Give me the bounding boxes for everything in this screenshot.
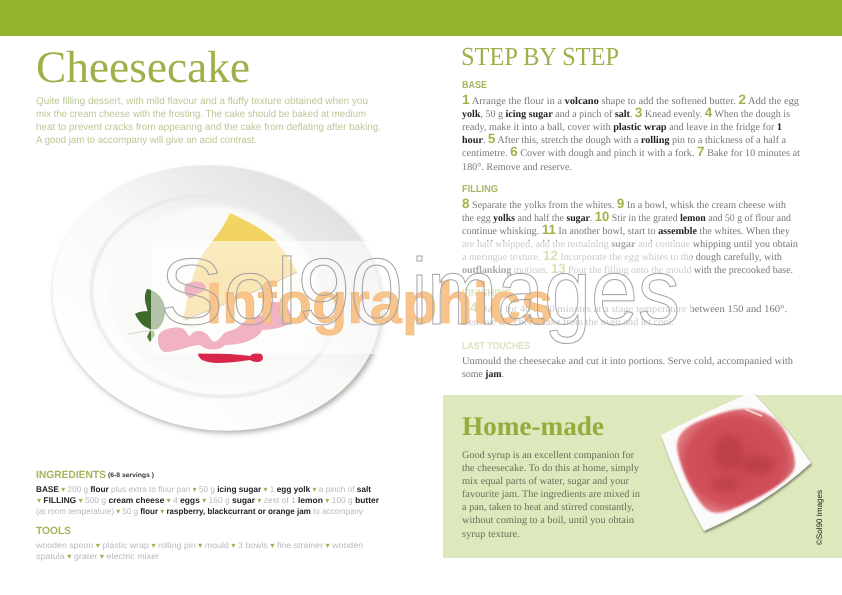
ingredients: (6-8 servings ) <box>108 472 154 479</box>
tools: TOOLS <box>36 525 71 537</box>
copyright: ©Sol90 Images <box>815 490 824 545</box>
section: filling: 8 Separate the yolks from the whites. 9 In a bowl, whisk the cream cheese with <box>462 196 786 211</box>
ingredients: ▾ FILLING ▾ 500 g cream cheese ▾ 4 eggs ▾ 160 g sugar ▾ zest of 1 lemon ▾ 100 g butter <box>37 495 380 505</box>
section: filling: continue whisking. 11 In another bowl, start to assemble the whites. When they <box>462 222 791 237</box>
intro text: A good jam to accompany will give an acid contrast. <box>36 135 257 146</box>
home-made text <box>462 450 640 540</box>
section: finishing <box>462 288 787 328</box>
section: base: hour. 5 After this, stretch the dough with a rolling pin to a thickness of a half a <box>462 131 786 146</box>
section: filling: a meringue texture. 12 Incorporate the egg whites to the dough carefully, with <box>462 248 782 263</box>
cheesecake slice <box>183 213 299 328</box>
intro text: Quite filling dessert, with mild flavour and a fluffy texture obtained when you <box>36 96 368 107</box>
ingredients: BASE ▾ 200 g flour plus extra to flour pan ▾ 50 g icing sugar ▾ 1 egg yolk ▾ a pinch of salt <box>36 484 371 494</box>
top green band <box>0 0 842 36</box>
home-made text: Good syrup is an excellent companion for <box>462 450 635 461</box>
panel background <box>443 395 842 558</box>
panel: home-made <box>443 392 842 558</box>
home-made text: the cheesecake. To do this at home, simply <box>462 463 640 474</box>
home-made text: without coming to a boil, until you obtain <box>462 515 634 526</box>
title: Cheesecake <box>36 42 250 92</box>
home-made text: a pan, taken to heat and stirred constantly, <box>462 502 634 513</box>
ingredients: (at room temperature) ▾ 50 g flour ▾ raspberry, blackcurrant or orange jam to accompany <box>36 506 364 516</box>
home-made text: syrup texture. <box>462 529 520 540</box>
section: base: BASE <box>462 80 487 91</box>
tools: spatula ▾ grater ▾ electric mixer <box>36 551 159 561</box>
watermark: Sol90 <box>160 239 403 344</box>
section: finishing: 14 Bake for 40 to 50 minutes at a stage temperature between 150 and 160°. <box>462 300 787 315</box>
section: filling <box>462 184 798 276</box>
watermark: Infographics <box>206 271 553 336</box>
watermark: mages <box>427 239 680 344</box>
section: last touches <box>462 341 793 380</box>
tools <box>35 525 363 561</box>
section: last touches: LAST TOUCHES <box>462 341 530 352</box>
raspberry sauce <box>158 302 292 352</box>
section: filling: outflanking motions. 13 Pour the filling onto the mould with the precooked base. <box>462 261 793 276</box>
section: base: centimetre. 6 Cover with dough and pinch it with a fork. 7 Bake for 10 minutes at <box>462 144 800 159</box>
section: filling: are half whipped, add the remaining sugar and continue whipping until you obtain <box>462 239 798 250</box>
section: finishing: Remove the cheesecake from the oven and let cool. <box>462 317 674 328</box>
section: base: 1 Arrange the flour in a volcano shape to add the softened butter. 2 Add the egg <box>462 92 799 107</box>
tools: wooden spoon ▾ plastic wrap ▾ rolling pin ▾ mould ▾ 3 bowls ▾ fine strainer ▾ wooden <box>35 540 363 550</box>
dark jam drop <box>198 353 263 363</box>
step by step heading: STEP BY STEP <box>461 42 619 71</box>
section: base <box>462 80 800 173</box>
icon: syrup bowl <box>661 392 812 533</box>
sauce on cake <box>184 282 206 298</box>
section: filling: FILLING <box>462 184 498 195</box>
section: last touches: Unmould the cheesecake and cut it into portions. Serve cold, accompanied with <box>462 356 793 367</box>
plate <box>35 144 401 454</box>
home-made text: favourite jam. The ingredients are mixed in <box>462 489 640 500</box>
ingredients <box>36 469 380 516</box>
home-made text: mix equal parts of water, sugar and your <box>462 476 630 487</box>
section: filling: the egg yolks and half the sugar. 10 Stir in the grated lemon and 50 g of flour and <box>462 209 791 224</box>
plate photo with cheesecake <box>35 144 401 454</box>
home-made heading: Home-made <box>462 411 604 441</box>
intro text <box>36 96 381 146</box>
section: last touches: some jam. <box>462 369 504 380</box>
ingredients: INGREDIENTS <box>36 469 106 481</box>
watermark <box>151 239 691 354</box>
mint leaf <box>128 289 165 342</box>
intro text: heat to prevent cracks from appearing and the cake from deflating after baking. <box>36 122 381 133</box>
section: base: yolk, 50 g icing sugar and a pinch of salt. 3 Knead evenly. 4 When the dough is <box>462 105 790 120</box>
section: base: ready, make it into a ball, cover with plastic wrap and leave in the fridge for 1 <box>462 122 782 133</box>
intro text: mix the cream cheese with the frosting. The cake should be baked at medium <box>36 109 366 120</box>
section: base: 180°. Remove and reserve. <box>462 162 572 173</box>
section: finishing: FINISHING <box>462 288 512 299</box>
